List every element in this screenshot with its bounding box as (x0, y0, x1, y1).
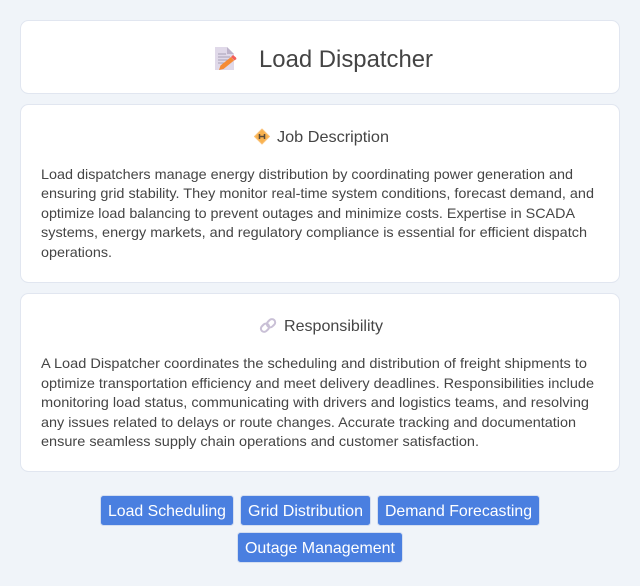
panel: responsibility (20, 294, 620, 472)
text block: responsibility: monitoring load status, communicating with drivers and logistics teams, and resolving (41, 394, 589, 410)
text block: job description: operations. (41, 244, 112, 260)
tag: Load Scheduling (100, 496, 234, 526)
tag: Demand Forecasting (378, 496, 540, 526)
tag: Grid Distribution: Grid Distribution (248, 503, 363, 520)
text block: job description (41, 166, 594, 260)
text block: responsibility: A Load Dispatcher coordinates the scheduling and distribution of freight shipments to (41, 355, 587, 371)
tag: Demand Forecasting: Demand Forecasting (385, 503, 532, 520)
title: Load Dispatcher (259, 46, 433, 73)
tag: Outage Management: Outage Management (245, 540, 396, 557)
tag: Load Scheduling: Load Scheduling (108, 503, 226, 520)
text block: responsibility: optimize transportation efficiency and meet delivery deadlines. Responsibilities include (41, 375, 594, 391)
icon: chain link (260, 318, 277, 333)
heading: responsibility: Responsibility (284, 318, 383, 335)
icon: orange diamond road sign (254, 129, 270, 144)
text block: responsibility: any issues related to delays or route changes. Accurate tracking and documentation (41, 414, 576, 430)
text block: responsibility (41, 355, 594, 449)
text block: job description: optimize load balancing to prevent outages and minimize costs. Expertise in SCADA (41, 205, 576, 221)
icon: document with pencil (215, 47, 236, 70)
text block: job description: systems, energy markets, and regulatory compliance is essential for efficient dispatch (41, 224, 587, 240)
text block: job description: ensuring grid stability. They monitor real-time system conditions, forecast demand, and (41, 185, 594, 201)
tag: Outage Management (238, 532, 402, 562)
panel: title card (20, 20, 620, 94)
panel: job description (20, 104, 620, 282)
tag: Grid Distribution (240, 496, 370, 526)
text block: job description: Load dispatchers manage energy distribution by coordinating power generation and (41, 166, 573, 182)
text block: responsibility: ensure seamless supply chain operations and customer satisfaction. (41, 433, 479, 449)
heading: job description: Job Description (277, 129, 389, 146)
